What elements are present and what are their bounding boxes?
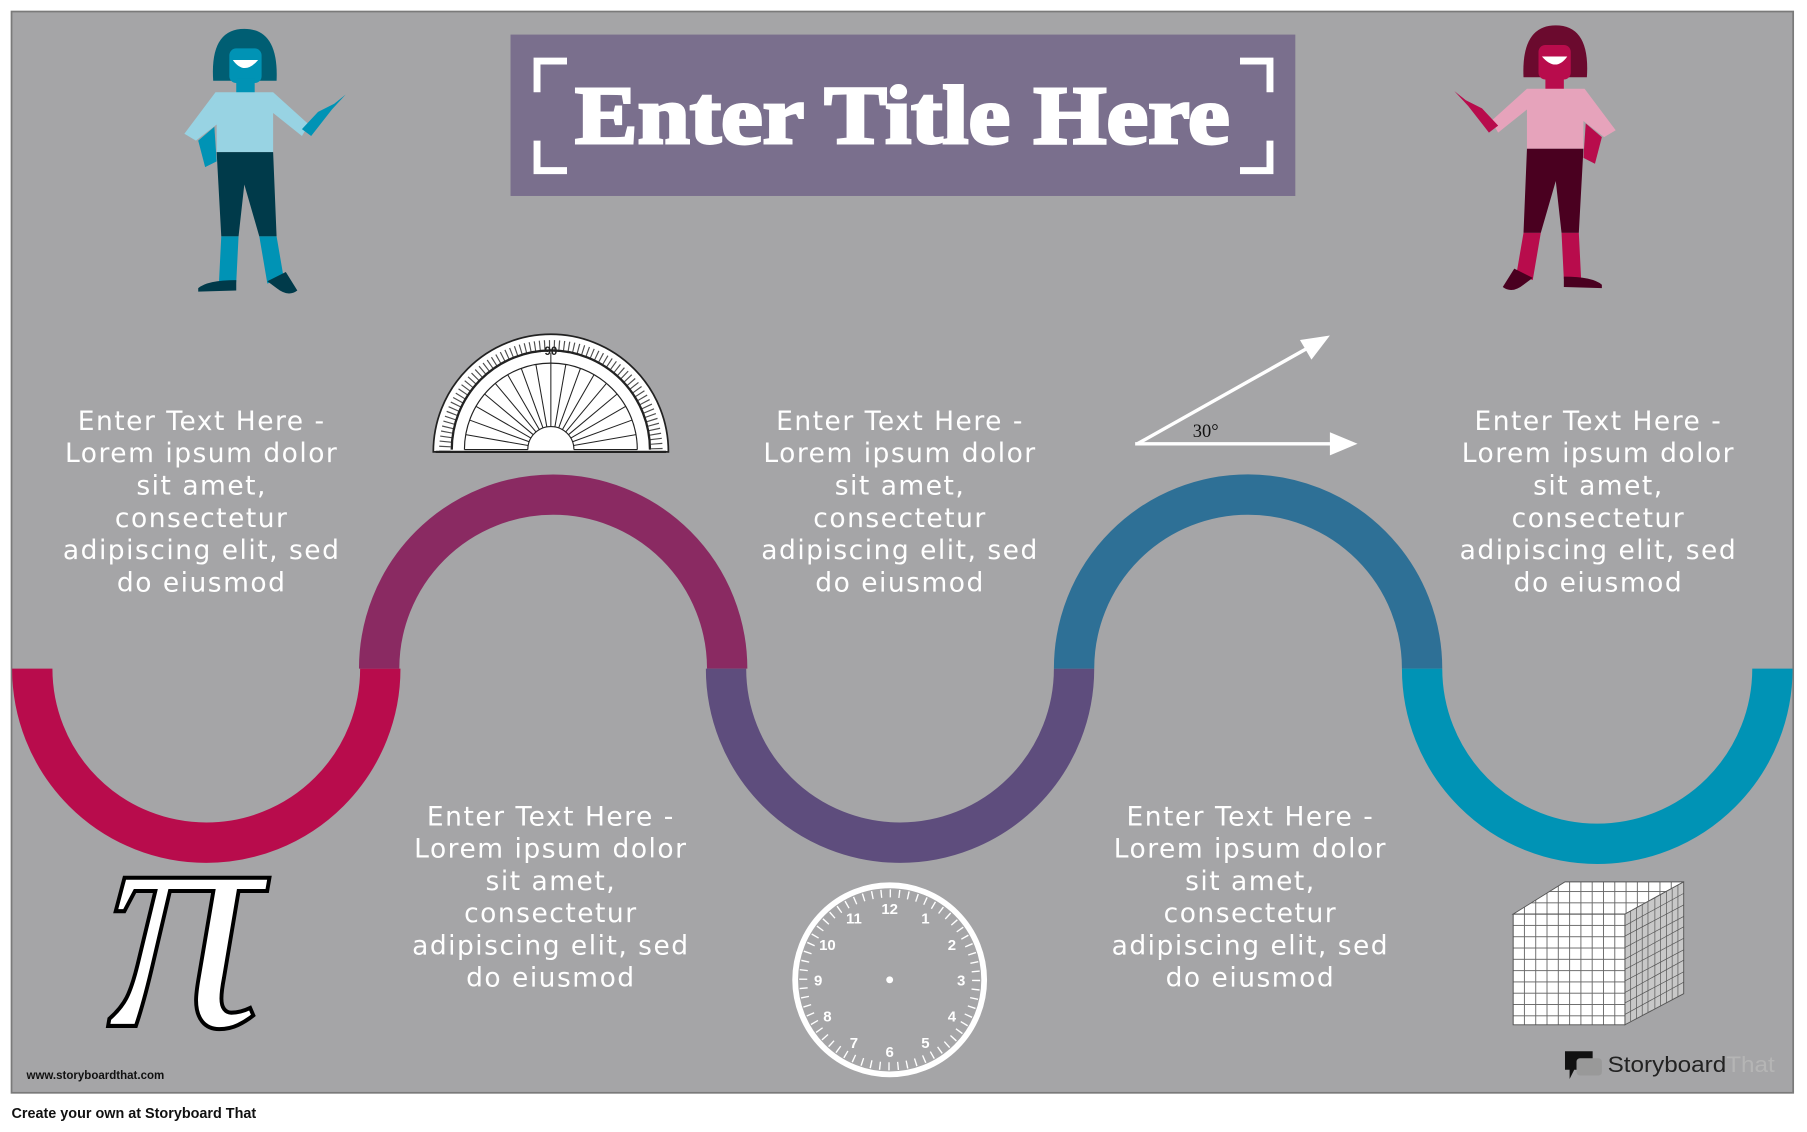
text block 2: sit amet, [486, 866, 616, 897]
icon: clock: 7 [850, 1035, 858, 1052]
icon: protractor: 90 [544, 346, 557, 358]
text block 3: sit amet, [835, 471, 965, 502]
footer caption: Create your own at Storyboard That [12, 1106, 256, 1122]
text block 4: Enter Text Here - [1126, 801, 1374, 832]
icon: clock: 12 [881, 901, 898, 918]
text block 2: adipiscing elit, sed [412, 930, 690, 961]
text block 5: consectetur [1512, 503, 1685, 534]
text block 2: consectetur [464, 898, 638, 929]
text block 4: Lorem ipsum dolor [1114, 834, 1387, 865]
icon: cube [1513, 882, 1684, 1025]
icon: 30 degree angle [1135, 335, 1358, 455]
text block 3 [761, 406, 1039, 598]
text block 2: Enter Text Here - [427, 801, 675, 832]
text block 5: Lorem ipsum dolor [1462, 438, 1735, 469]
title box: Enter Title Here [575, 69, 1230, 161]
icon: clock [795, 885, 984, 1074]
logo: Storyboard That: Storyboard That [1608, 1052, 1775, 1077]
logo: Storyboard That [1565, 1051, 1775, 1079]
figure: teal girl [184, 29, 346, 293]
icon: clock: 8 [823, 1008, 832, 1025]
text block 5 [1460, 406, 1737, 598]
text block 3: adipiscing elit, sed [761, 535, 1039, 566]
text block 3: Lorem ipsum dolor [763, 438, 1037, 469]
icon: clock: 6 [886, 1044, 894, 1061]
text block 1: consectetur [115, 503, 288, 534]
icon: clock: 9 [814, 973, 822, 990]
text block 4: sit amet, [1185, 866, 1316, 897]
text block 1: Enter Text Here - [78, 406, 326, 437]
text block 5: Enter Text Here - [1474, 406, 1722, 437]
text block 5: sit amet, [1533, 471, 1664, 502]
icon: clock: 5 [921, 1035, 930, 1052]
text block 1: Lorem ipsum dolor [65, 438, 338, 469]
text block 4 [1112, 801, 1389, 994]
text block 1: do eiusmod [117, 567, 286, 598]
icon: 30 degree angle: 30° [1193, 421, 1219, 441]
icon: clock: 1 [921, 910, 930, 927]
text block 2: do eiusmod [466, 963, 636, 994]
icon: clock: 4 [948, 1008, 957, 1025]
text block 3: do eiusmod [815, 567, 985, 598]
figure: pink girl [1454, 25, 1616, 290]
icon: clock: 11 [846, 910, 862, 927]
text block 4: do eiusmod [1166, 963, 1335, 994]
text block 5: adipiscing elit, sed [1460, 535, 1737, 566]
wave timeline [32, 495, 1772, 844]
icon: protractor [433, 334, 668, 452]
text block 2 [412, 801, 690, 994]
website url: www.storyboardthat.com [26, 1070, 164, 1082]
icon: pi: π [106, 739, 272, 1096]
icon: clock: 10 [819, 937, 836, 954]
text block 4: adipiscing elit, sed [1112, 930, 1389, 961]
text block 3: consectetur [813, 503, 987, 534]
text block 1: sit amet, [136, 471, 267, 502]
icon: clock: 2 [948, 937, 956, 954]
text block 1 [63, 406, 340, 598]
icon: clock: 3 [957, 973, 965, 990]
text block 1: adipiscing elit, sed [63, 535, 340, 566]
title box [511, 35, 1295, 196]
text block 3: Enter Text Here - [776, 406, 1024, 437]
text block 2: Lorem ipsum dolor [414, 834, 688, 865]
text block 5: do eiusmod [1514, 567, 1683, 598]
text block 4: consectetur [1164, 898, 1337, 929]
